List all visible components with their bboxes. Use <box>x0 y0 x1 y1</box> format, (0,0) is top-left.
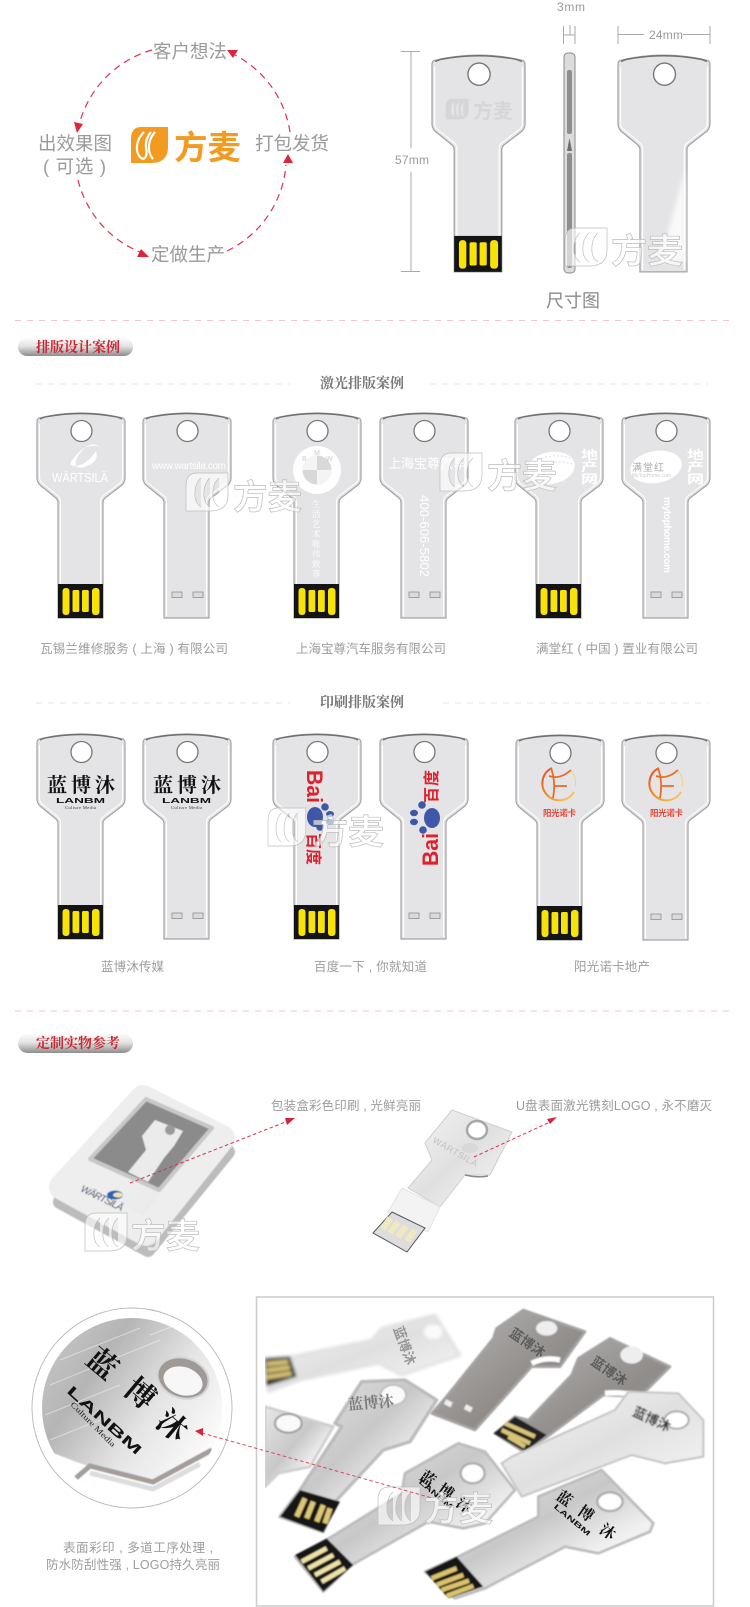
cycle label: production: 定做生产 <box>151 244 225 265</box>
printed logos on keys: 蓝博沐 <box>347 1392 395 1414</box>
arrow: idea to proof <box>74 50 152 133</box>
key: Mantanghong front: 地 <box>581 447 598 462</box>
key: centre front <box>295 1443 515 1592</box>
caption: BMW dealer: 上海宝尊汽车服务有限公司 <box>296 641 446 656</box>
key: Sunshine front: 阳光诺卡 <box>543 808 576 818</box>
cycle label: customer idea: 客户想法 <box>153 41 227 62</box>
engraved logo: 方麦 <box>473 99 513 123</box>
key: BMW front: 艺 <box>312 519 321 529</box>
key: Mantanghong back: 网 <box>687 472 704 486</box>
key: Lanbomu back: 蓝博沐 <box>153 773 221 797</box>
arrow: proof to production <box>78 180 149 257</box>
brand logo: 方麦 <box>174 129 241 166</box>
printed logos on keys: 沐 <box>596 1520 619 1544</box>
dimension: thickness 3mm: 3mm <box>557 0 585 14</box>
key: Mantanghong back <box>622 413 710 618</box>
hole <box>152 1351 214 1405</box>
printed logos on keys: 沐 <box>453 1494 476 1517</box>
watermark <box>186 473 302 517</box>
key: Wartsila front: WÄRTSILÄ <box>52 470 108 485</box>
caption: Wartsila: 瓦锡兰维修服务 ( 上海 ) 有限公司 <box>40 641 228 656</box>
printed logos on keys: 蓝博沐 <box>588 1353 631 1389</box>
printed logos on keys: 蓝博沐 <box>391 1324 419 1368</box>
printed logo <box>64 1342 194 1458</box>
key: top right dark <box>493 1338 670 1452</box>
key: BMW back: 400-606-5802 <box>417 495 432 577</box>
key: right white: 蓝博沐 <box>630 1403 674 1435</box>
key: Mantanghong back: 满堂红 <box>632 461 664 474</box>
watermark <box>378 1487 493 1529</box>
printed logos on keys: 蓝博沐 <box>507 1324 549 1361</box>
key: Sunshine front <box>516 735 604 940</box>
section heading: real samples: 定制实物参考 <box>36 1035 120 1052</box>
brand logo <box>131 127 241 166</box>
printed logo: 蓝 <box>80 1342 124 1387</box>
key: Mantanghong back: 地 <box>687 447 704 462</box>
watermark: 方麦 <box>424 1491 493 1529</box>
key: Wartsila front <box>37 413 125 618</box>
key: BMW front: 唯 <box>312 539 321 549</box>
key: Sunshine back: 阳光诺卡 <box>650 808 683 818</box>
dimension drawing <box>395 0 710 311</box>
watermark: 方麦 <box>233 479 302 517</box>
dimension: height 57mm: 57mm <box>395 153 429 167</box>
key: Baidu front <box>273 734 361 939</box>
magnified detail circle <box>30 1300 240 1508</box>
key: Wartsila back: www.wartsila.com <box>151 461 226 472</box>
section heading: layout cases: 排版设计案例 <box>36 339 120 356</box>
section heading: real samples <box>18 1034 133 1053</box>
engraved logo <box>446 99 513 123</box>
photo: group of printed keys <box>256 1297 714 1606</box>
printed logos on keys: 博 <box>434 1480 457 1504</box>
photo: single laser engraved key: WÄRTSILÄ <box>431 1135 479 1169</box>
key: BMW front: 生 <box>312 499 321 509</box>
watermark: 方麦 <box>611 233 683 271</box>
key: Baidu back: 百度 <box>422 770 441 803</box>
key: Mantanghong front <box>515 413 603 618</box>
key: BMW front: B <box>302 456 307 463</box>
dimension: thickness 3mm <box>557 0 585 44</box>
cycle label: optional note: ( 可选 ) <box>43 156 106 177</box>
key: Lanbomu front: LANBM <box>56 796 105 805</box>
watermark <box>440 453 557 496</box>
key: BMW front: 术 <box>312 529 321 539</box>
section heading: layout cases <box>18 338 133 356</box>
key: Baidu back: Bai <box>418 833 443 866</box>
key front view <box>432 55 525 272</box>
key: Baidu front: 百度 <box>304 833 323 865</box>
sleeve <box>388 1188 440 1232</box>
callout arrow: detail <box>195 1428 432 1498</box>
key: Mantanghong back: 产 <box>687 459 704 474</box>
watermark: 方麦 <box>487 458 557 496</box>
key: Mantanghong back: mytophome.com <box>661 497 672 573</box>
dimension: width 24mm <box>618 26 710 44</box>
key: left cropped <box>265 1407 333 1487</box>
printed logo: Culture Media <box>69 1400 118 1449</box>
key inside box <box>128 1120 183 1182</box>
box window <box>90 1099 212 1190</box>
key side view <box>564 53 575 273</box>
key: centre left <box>280 1380 437 1533</box>
key: Lanbomu back <box>143 734 231 939</box>
subheading: print cases: 印刷排版案例 <box>320 694 404 711</box>
printed logos on keys <box>347 1324 631 1544</box>
cycle label: proof optional: 出效果图 <box>38 133 112 154</box>
key: Wartsila back <box>143 413 231 618</box>
caption: Mantanghong: 满堂红 ( 中国 ) 置业有限公司 <box>536 641 698 656</box>
arrow: production to delivery <box>227 154 293 251</box>
watermark <box>85 1213 200 1256</box>
printed logos on keys: LANBM <box>417 1477 455 1511</box>
key: BMW back <box>380 413 468 618</box>
callout text: key: U盘表面激光镌刻LOGO , 永不磨灭 <box>516 1098 712 1113</box>
watermark <box>268 808 384 852</box>
key: BMW back: 上海宝尊汽车 <box>388 456 466 471</box>
key: Mantanghong back: MyTopHome.com <box>632 473 671 479</box>
watermark: 方麦 <box>312 814 384 852</box>
caption: Sunshine: 阳光诺卡地产 <box>574 960 650 974</box>
printed logos on keys: 博 <box>574 1502 597 1525</box>
key: Lanbomu front: 蓝博沐 <box>47 773 115 797</box>
printed logos on keys: 蓝 <box>553 1487 576 1511</box>
caption: Lanbomu: 蓝博沐传媒 <box>101 959 164 974</box>
caption: Baidu: 百度一下 , 你就知道 <box>314 959 427 974</box>
key: BMW front: 伟 <box>312 549 321 559</box>
key: Mantanghong front: 网 <box>581 472 598 486</box>
key: BMW front: 致 <box>312 559 321 569</box>
watermark: 方麦 <box>131 1218 200 1256</box>
key: BMW front <box>273 413 361 618</box>
key: Lanbomu back: Culture Media <box>171 805 202 810</box>
key: BMW front: M <box>314 450 320 457</box>
key: BMW front: 尊 <box>312 569 321 579</box>
arrow: delivery to idea <box>227 50 290 132</box>
key: Sunshine back <box>622 735 710 940</box>
photo: gift tin box <box>60 1098 228 1250</box>
key: Lanbomu back: LANBM <box>162 796 211 805</box>
brushed metal surface <box>42 1318 222 1479</box>
key: bottom front <box>425 1470 653 1598</box>
key: Baidu front: Bai <box>302 770 327 803</box>
watermark <box>565 228 683 271</box>
process cycle diagram <box>38 41 329 265</box>
dimension: height 57mm <box>395 51 429 272</box>
printed logos on keys: LANBM <box>552 1502 592 1538</box>
laser row keys <box>37 413 710 618</box>
box branding: WÄRTSILÄ <box>79 1183 126 1214</box>
connector <box>373 1212 425 1252</box>
key: Lanbomu front <box>37 734 125 939</box>
photo: single laser engraved key <box>373 1110 512 1252</box>
printed logo: LANBM <box>64 1382 145 1458</box>
key: BMW front: 活 <box>312 509 321 519</box>
key: top middle dark <box>432 1310 585 1430</box>
dimension caption: 尺寸图 <box>546 291 600 311</box>
printed logo: 博 <box>118 1372 162 1417</box>
key back view <box>618 55 710 272</box>
key: top left blurred <box>265 1315 460 1392</box>
printed logos on keys: 蓝 <box>416 1467 439 1491</box>
subheading: laser cases: 激光排版案例 <box>320 375 404 392</box>
key: BMW front: W <box>326 456 333 463</box>
key: Lanbomu front: Culture Media <box>65 805 96 810</box>
key: Baidu back <box>380 734 468 939</box>
dimension: width 24mm: 24mm <box>649 28 683 42</box>
callout arrow: box <box>130 1118 295 1183</box>
key: Mantanghong front: 产 <box>581 459 598 474</box>
detail caption: 表面彩印 , 多道工序处理 , <box>63 1540 213 1555</box>
print row keys <box>37 734 710 940</box>
callout arrow: key <box>474 1117 557 1157</box>
cycle label: delivery: 打包发货 <box>255 133 329 154</box>
key: right white <box>502 1392 703 1497</box>
printed logo: 沐 <box>150 1404 194 1449</box>
callout text: box: 包装盒彩色印刷 , 光鲜亮丽 <box>271 1098 421 1113</box>
detail caption: 防水防刮性强 , LOGO持久亮丽 <box>46 1557 220 1572</box>
detail caption <box>46 1540 220 1572</box>
